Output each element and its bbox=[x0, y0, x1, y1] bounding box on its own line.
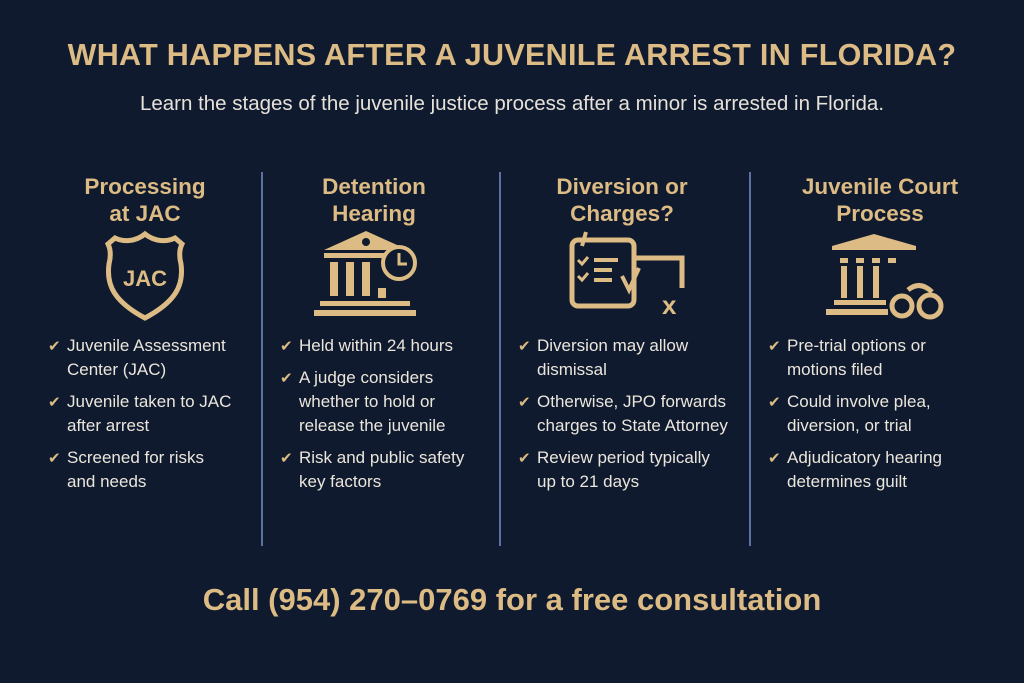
call to action: Call (954) 270–0769 for a free consultation bbox=[203, 582, 821, 617]
icon: courthouse with handcuffs bbox=[826, 234, 944, 320]
heading: diversion bbox=[556, 174, 688, 226]
icon: checklist: x bbox=[662, 290, 677, 320]
bullets: Pre-trial options or bbox=[787, 336, 926, 355]
heading: processing bbox=[84, 174, 206, 226]
bullets: key factors bbox=[299, 472, 381, 491]
heading: court: Juvenile Court bbox=[802, 174, 958, 199]
panel: diversion or charges bbox=[520, 174, 728, 491]
bullets: determines guilt bbox=[787, 472, 907, 491]
heading: detention: Hearing bbox=[332, 201, 416, 226]
bullets: Adjudicatory hearing bbox=[787, 448, 942, 467]
bullets: Review period typically bbox=[537, 448, 710, 467]
panel: detention hearing bbox=[282, 174, 464, 491]
bullets bbox=[770, 336, 942, 491]
title: WHAT HAPPENS AFTER A JUVENILE ARREST IN FLORIDA? bbox=[68, 38, 956, 72]
bullets: A judge considers bbox=[299, 368, 433, 387]
bullets: after arrest bbox=[67, 416, 149, 435]
bullets: release the juvenile bbox=[299, 416, 445, 435]
icon: shield bbox=[104, 230, 186, 321]
bullets: Diversion may allow bbox=[537, 336, 688, 355]
heading: detention bbox=[322, 174, 426, 226]
bullets bbox=[520, 336, 728, 491]
bullets: Could involve plea, bbox=[787, 392, 931, 411]
bullets: dismissal bbox=[537, 360, 607, 379]
heading: court: Process bbox=[836, 201, 924, 226]
heading: detention: Detention bbox=[322, 174, 426, 199]
bullets bbox=[282, 336, 464, 491]
bullets: diversion, or trial bbox=[787, 416, 912, 435]
heading: processing: Processing bbox=[84, 174, 206, 199]
heading: processing: at JAC bbox=[109, 201, 181, 226]
bullets: Otherwise, JPO forwards bbox=[537, 392, 726, 411]
bullets: Juvenile taken to JAC bbox=[67, 392, 231, 411]
bullets: Risk and public safety bbox=[299, 448, 464, 467]
icon: courthouse with clock bbox=[314, 231, 417, 316]
bullets: and needs bbox=[67, 472, 146, 491]
panel: juvenile court process bbox=[770, 174, 958, 491]
subtitle: Learn the stages of the juvenile justice process after a minor is arrested in Florida. bbox=[140, 92, 884, 115]
bullets: Juvenile Assessment bbox=[67, 336, 226, 355]
heading: diversion: Charges? bbox=[570, 201, 674, 226]
heading: court bbox=[802, 174, 958, 226]
bullets: charges to State Attorney bbox=[537, 416, 728, 435]
heading: diversion: Diversion or bbox=[556, 174, 688, 199]
bullets: up to 21 days bbox=[537, 472, 639, 491]
bullets: Center (JAC) bbox=[67, 360, 166, 379]
bullets bbox=[50, 336, 231, 491]
bullets: Held within 24 hours bbox=[299, 336, 453, 355]
icon: shield: JAC bbox=[123, 266, 167, 291]
bullets: whether to hold or bbox=[299, 392, 435, 411]
panel: processing at JAC bbox=[50, 174, 231, 491]
icon: checklist bbox=[570, 232, 684, 320]
bullets: Screened for risks bbox=[67, 448, 204, 467]
bullets: motions filed bbox=[787, 360, 882, 379]
